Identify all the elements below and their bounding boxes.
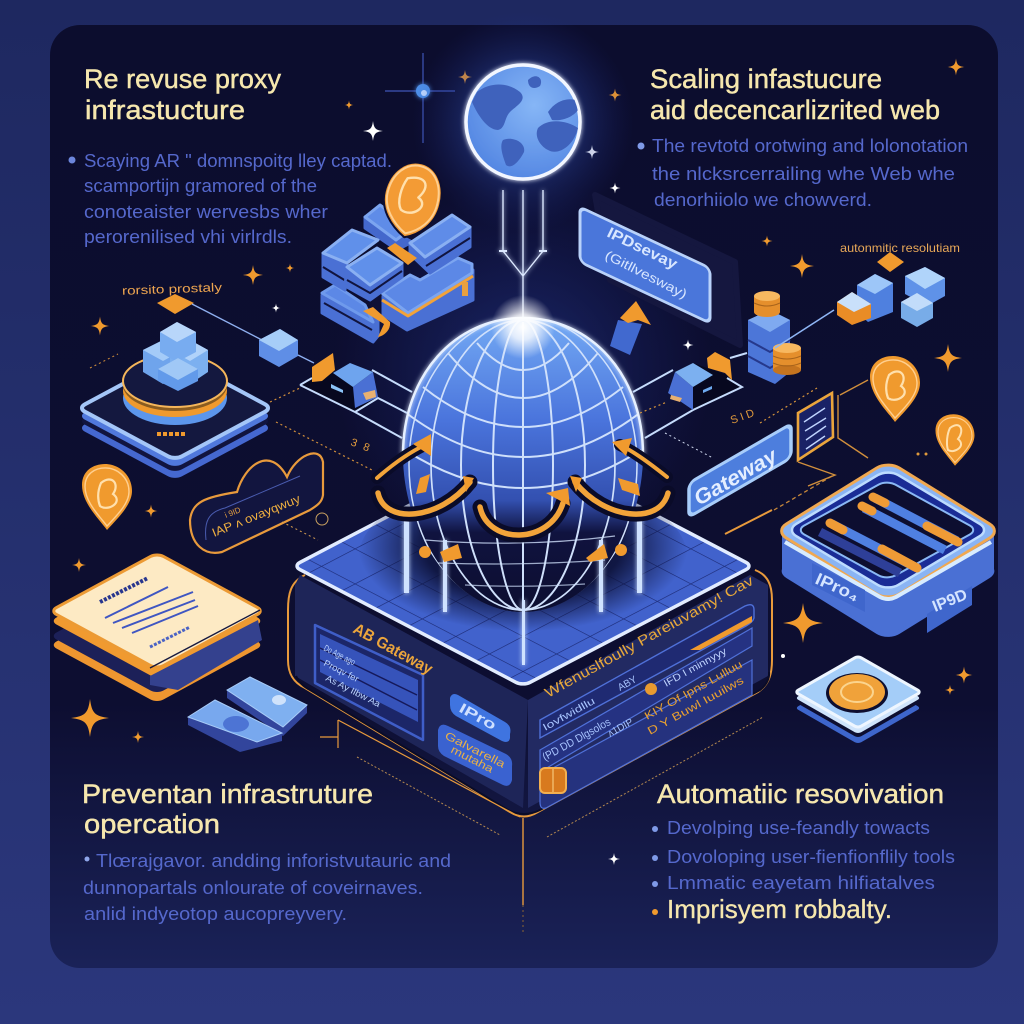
- centre arrow: [480, 488, 570, 535]
- tiled top: [293, 446, 753, 686]
- left blocks: [323, 230, 402, 300]
- server plates: IP9D: [930, 586, 970, 616]
- cubes: [143, 322, 208, 391]
- heading: top right: aid decencarlizrited web: [650, 95, 940, 125]
- icon: up arrow: [610, 301, 651, 355]
- stripe 3: KIY Of Ipns Lulluu: [643, 659, 745, 723]
- icon: paper stack: [50, 553, 264, 703]
- big wireframe globe: [403, 295, 643, 613]
- heading: top right: [650, 64, 940, 125]
- orange strap middle: [387, 243, 417, 265]
- text block: bottom right: [652, 817, 955, 924]
- node: right house connector: [633, 352, 747, 438]
- icon: coin tile: [795, 656, 921, 744]
- icon: coin stacks: [748, 291, 801, 384]
- panel on left face: As Ay Ilbw Aa: [324, 673, 382, 709]
- icon: small cube node left: [259, 329, 298, 367]
- left face: [295, 575, 528, 808]
- panel on left face: Do Age ago: [322, 643, 357, 667]
- panel: IP Gateway sign: [580, 195, 740, 345]
- heading: top left: Re revuse proxy: [84, 64, 281, 94]
- disc: [123, 355, 227, 425]
- text block: bottom right: Imprisyem robbalty.: [667, 894, 892, 924]
- icon: cloud label: [190, 453, 328, 553]
- connector line to cubes: [775, 310, 834, 348]
- stripe 3: [540, 659, 752, 808]
- platform orange outline: [288, 570, 772, 816]
- label: automatic resolution: autonmitic resolutiam: [840, 241, 960, 255]
- back block: [365, 205, 412, 250]
- panel: IP Gateway sign: (Gitllvesway): [603, 247, 690, 302]
- heading: bottom right: Automatiic resovivation: [657, 779, 944, 809]
- panel on left face: Proqv fer: [322, 658, 360, 684]
- stripe 1: ABY: [616, 674, 639, 694]
- stripe 3: ᴧ1DIP: [606, 717, 636, 740]
- stripe 2: IFD I minnyyy: [662, 646, 729, 690]
- icon: orange diamond top left: [157, 294, 194, 314]
- label: AB Gateway: AB Gateway: [350, 621, 435, 678]
- text block: top left: [68, 150, 392, 247]
- server plates: IPro₄: [812, 569, 862, 605]
- decorative stars: [71, 58, 972, 865]
- connector arrows from top globe to main globe: [499, 190, 547, 325]
- main platform: [288, 446, 772, 816]
- lower-left block: [322, 285, 378, 342]
- top globe with glow: [424, 25, 620, 218]
- icon: orange diamond top right: [877, 252, 904, 272]
- longitudes: [522, 322, 524, 612]
- icon: cube cluster right: [837, 267, 945, 327]
- icon: cloud label: IAP ᴧ ovayqwuy: [210, 492, 302, 540]
- haze behind main globe: [333, 180, 713, 560]
- coin: [375, 156, 449, 244]
- server plates: [812, 563, 972, 633]
- text block: top right: [638, 135, 968, 210]
- text block: top right: the nlcksrcerrailing whe Web whe: [652, 163, 955, 184]
- stripe 1: [540, 605, 754, 738]
- orange circular arrows: [377, 434, 668, 562]
- heading: bottom left: Preventan infrastruture: [82, 779, 373, 809]
- crosshair node: [385, 53, 455, 143]
- text block: top left: perorenilised vhi virlrdls.: [84, 226, 292, 247]
- icon: document: [798, 393, 833, 460]
- text block: bottom right: Dovoloping user-fienfionflily tools: [667, 846, 955, 867]
- heading: top left: [84, 64, 281, 125]
- icon: location pin left: [82, 464, 132, 530]
- text block: top right: The revtotd orotwing and lolonotation: [652, 135, 968, 156]
- heading: bottom left: opercation: [84, 809, 220, 839]
- right block: [410, 215, 470, 273]
- text block: top left: conoteaister wervesbs wher: [84, 201, 328, 222]
- label: curved reverse proxy: rorsito prostaly: [122, 280, 222, 298]
- pill: gateway status: [438, 725, 512, 786]
- header text on right face: Wfenuslfoully Pareiuvamy! Cav: [542, 572, 756, 701]
- text block: top left: scamportijn gramored of the: [84, 175, 317, 196]
- icon: money bills: [188, 677, 307, 752]
- lower-right block: [382, 258, 473, 330]
- dotted lines and labels near the platform: [320, 380, 868, 935]
- label: Gateway tag: [689, 424, 791, 517]
- heading: top right: Scaling infastucure: [650, 64, 882, 94]
- text block: bottom left: dunnopartals onlourate of coveirnaves.: [83, 877, 423, 898]
- small label: SIP right: S I D: [729, 407, 756, 427]
- pill: gateway status: Galvarella: [443, 730, 508, 771]
- panel: IP Gateway sign: IPDsevay: [604, 224, 681, 273]
- heading: bottom left: [82, 779, 373, 839]
- pill: IP Pro: [450, 694, 510, 742]
- stripe 1: Iovfwidllu: [541, 696, 597, 734]
- text block: bottom right: Devolping use-feandly towacts: [667, 817, 930, 838]
- text block: bottom left: anlid indyeotop aucopreyvery.: [84, 903, 347, 924]
- icon: cloud label: i 9ID: [223, 505, 242, 520]
- icon: platform with cubes: [78, 322, 272, 480]
- latitudes: [477, 343, 569, 370]
- pill: IP Pro: IPro: [457, 700, 499, 733]
- stripe 3: D Y Buwl Iuuilws: [646, 674, 746, 738]
- icon: location pins right: [870, 356, 974, 466]
- text block: bottom left: [83, 850, 451, 924]
- right arrow pair: [570, 438, 668, 514]
- pill: gateway status: mutaha: [449, 744, 496, 776]
- text block: top left: Scaying AR " domnspoitg lley captad.: [84, 150, 392, 171]
- label: Gateway tag: Gateway: [690, 444, 782, 510]
- icon: server tray: [775, 461, 1001, 641]
- tray bars: [820, 497, 958, 573]
- stripe 2: [540, 616, 752, 772]
- node: left house connector: [300, 353, 412, 438]
- small label: 3 8 left: 3 8: [349, 437, 373, 455]
- heading: top left: infrastucture: [85, 95, 245, 125]
- lines between left nodes: [90, 304, 372, 470]
- small orange ties: [416, 474, 640, 562]
- text block: top right: denorhiiolo we chowverd.: [654, 189, 872, 210]
- left arrow pair: [377, 434, 474, 514]
- glowing pillars: [404, 515, 642, 665]
- text block: bottom right: Lmmatic eayetam hilfiatalves: [667, 872, 935, 893]
- orange strap lower-left: [363, 307, 390, 337]
- text block: bottom left: Tlœrajgavor. andding inforistvutauric and: [96, 850, 451, 871]
- stripe 2: (PD DD Dlgsolos: [541, 716, 613, 764]
- panel on left face: [315, 625, 423, 740]
- icon: stacked blocks with coin: [322, 156, 473, 342]
- right face: [528, 575, 768, 808]
